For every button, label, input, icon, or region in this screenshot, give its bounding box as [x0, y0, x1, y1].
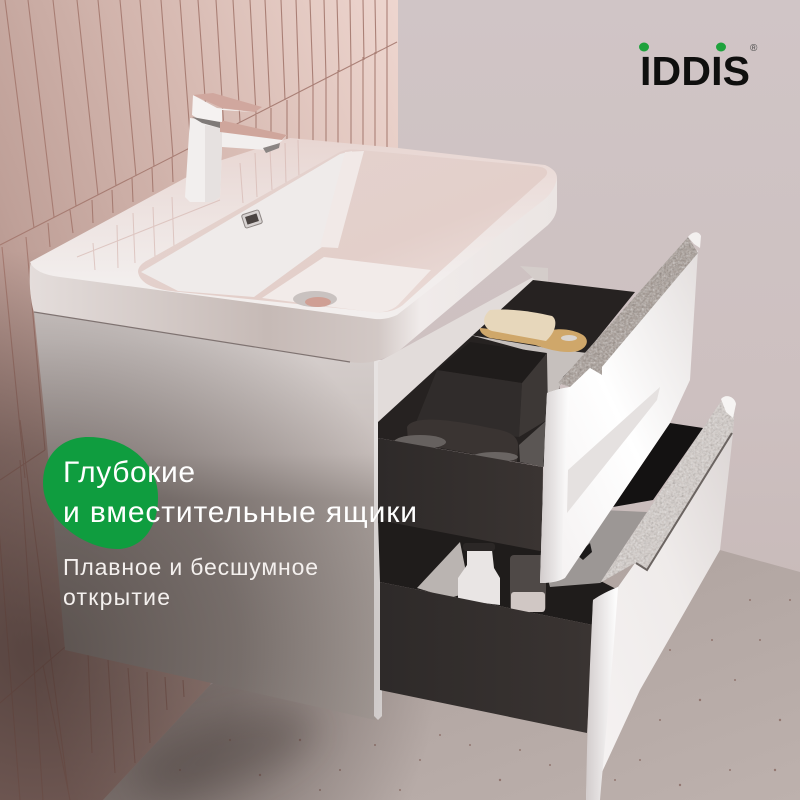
- dark shading over lower left: [0, 240, 440, 800]
- logo: IDDIS: IDDIS: [640, 48, 750, 94]
- spout top reflection: [220, 120, 287, 140]
- lower drawer handle: [600, 396, 735, 583]
- chrome band: [192, 117, 220, 128]
- lever head: [192, 95, 253, 122]
- logo: IDDIS: ®: [750, 43, 758, 54]
- upper front recess: [567, 387, 660, 513]
- drain: [293, 291, 337, 307]
- lever top reflection: [193, 93, 262, 112]
- heading: [63, 456, 417, 529]
- organizer box: [415, 342, 547, 467]
- upper drawer handle: [558, 237, 698, 387]
- basin outer rim: [30, 178, 557, 363]
- cabinet body: [34, 266, 548, 720]
- lower front rounded cap: [586, 587, 618, 800]
- upper front rounded cap: [540, 387, 570, 583]
- green blob accent: [43, 437, 158, 549]
- bowl corner highlight: [320, 151, 364, 248]
- upper drawer front: [540, 232, 701, 583]
- folded cloth: [470, 335, 587, 420]
- drawer side panel: [378, 438, 543, 556]
- bottle and jar: [458, 543, 546, 612]
- upper top cap: [688, 232, 701, 248]
- background: speckled floor: [103, 550, 800, 800]
- lower drawer side panel: [380, 582, 593, 733]
- tiled wall: [0, 0, 400, 800]
- basin bowl: [138, 149, 547, 312]
- black clip: [577, 543, 592, 560]
- bowl floor: [262, 257, 431, 312]
- cabinet gap line: [34, 312, 350, 362]
- bowl shelf: [141, 151, 352, 297]
- deck tile reflections: [77, 140, 299, 270]
- subheading: открытие: [63, 584, 170, 610]
- overflow: [241, 210, 263, 228]
- faucet: [185, 93, 287, 202]
- basin top deck: [30, 138, 557, 319]
- cloth and jars in drawer: [394, 420, 518, 462]
- aerator: [263, 143, 280, 153]
- heading: и вместительные ящики: [63, 496, 417, 529]
- basin: [30, 138, 557, 363]
- faucet column and spout: [185, 118, 287, 202]
- lower handle shadow line: [636, 433, 732, 570]
- wooden brush: [480, 309, 587, 352]
- lower drawer interior: [378, 520, 618, 625]
- lower drawer front: [586, 396, 736, 800]
- subheading: [63, 554, 318, 610]
- drawer interior: [378, 280, 635, 467]
- grey cloth mat: [548, 510, 647, 587]
- upper drawer: [378, 280, 635, 556]
- lower drawer: [378, 423, 703, 733]
- subheading: Плавное и бесшумное: [63, 554, 318, 580]
- heading: Глубокие: [63, 456, 195, 489]
- lower top cap: [721, 396, 736, 418]
